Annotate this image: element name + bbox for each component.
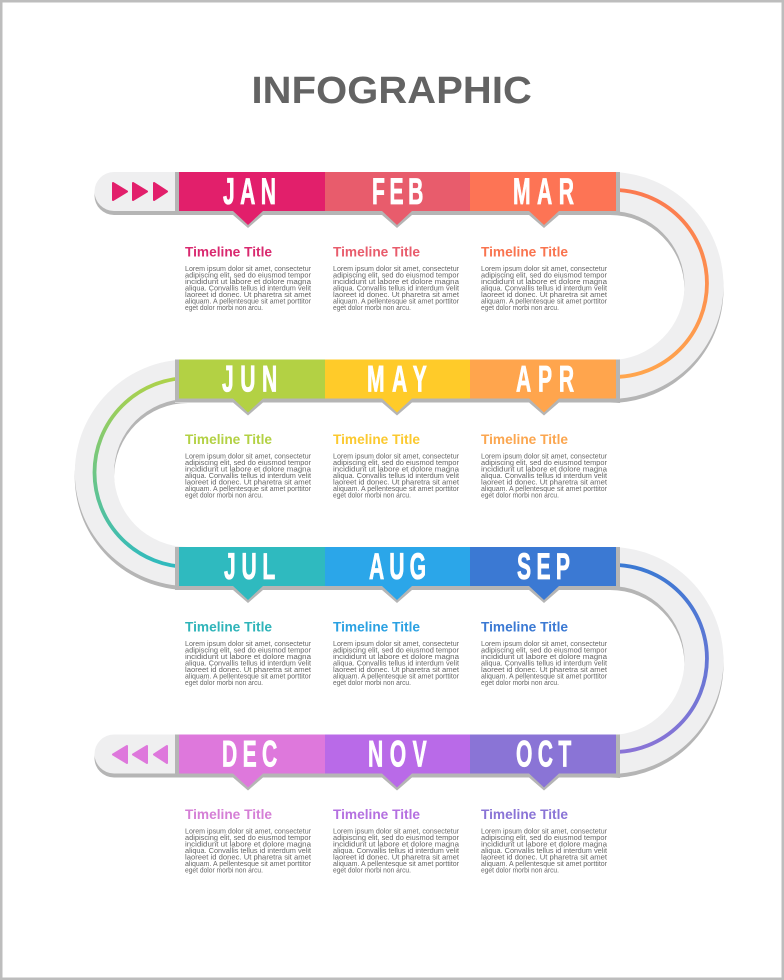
text block: February: eget dolor morbi non arcu. (333, 305, 411, 312)
text block: February (333, 244, 460, 312)
text block: August: adipiscing elit, sed do eiusmod tempor (333, 648, 460, 654)
month: JAN: JAN (223, 172, 276, 213)
text block: January: aliquam. A pellentesque sit amet porttitor (185, 298, 312, 306)
text block: August: laoreet id donec. Ut pharetra sit amet (333, 667, 459, 674)
curve: June to July connector (75, 360, 189, 590)
text block: November: Timeline Title (333, 806, 420, 822)
text block: May: aliqua. Convallis tellus id interdum velit (333, 473, 459, 480)
text block: April: adipiscing elit, sed do eiusmod tempor (481, 460, 608, 467)
text block: January: eget dolor morbi non arcu. (185, 305, 263, 312)
month: NOV: NOV (368, 735, 427, 775)
text block: February: Lorem ipsum dolor sit amet, consectetur (333, 266, 460, 273)
month: NOV (325, 734, 470, 788)
month: AUG: AUG (369, 547, 426, 588)
month: OCT (470, 734, 616, 788)
month: FEB: FEB (372, 172, 423, 213)
text block: May: Timeline Title (333, 431, 420, 447)
text block: November: adipiscing elit, sed do eiusmod tempor (333, 835, 460, 842)
title: INFOGRAPHIC (252, 70, 532, 112)
month: APR: APR (516, 360, 574, 400)
month: DEC (179, 734, 325, 788)
text block: July: aliqua. Convallis tellus id interdum velit (185, 660, 311, 668)
text block: December (185, 806, 312, 874)
text block: May: Lorem ipsum dolor sit amet, consectetur (333, 454, 460, 460)
text block: September: eget dolor morbi non arcu. (481, 680, 559, 687)
text block: February: adipiscing elit, sed do eiusmod tempor (333, 272, 460, 280)
text block: January: incididunt ut labore et dolore magna (185, 279, 311, 286)
text block: August: Timeline Title (333, 618, 420, 634)
text block: November: aliqua. Convallis tellus id interdum velit (333, 848, 459, 855)
month: MAR (470, 172, 616, 225)
text block: March: Timeline Title (481, 244, 568, 260)
text block: December: incididunt ut labore et dolore magna (185, 842, 311, 848)
text block: October: eget dolor morbi non arcu. (481, 868, 559, 874)
text block: April (481, 431, 608, 500)
text block: June: adipiscing elit, sed do eiusmod tempor (185, 460, 312, 467)
row 1 timeline bar (175, 172, 620, 228)
text block: November: eget dolor morbi non arcu. (333, 868, 411, 874)
text block: March: laoreet id donec. Ut pharetra sit amet (481, 292, 607, 299)
text block: December: aliquam. A pellentesque sit amet porttitor (185, 861, 312, 868)
text block: October: Timeline Title (481, 806, 568, 822)
text block: April: incididunt ut labore et dolore magna (481, 466, 607, 474)
text block: July: aliquam. A pellentesque sit amet porttitor (185, 674, 312, 680)
month: FEB (325, 172, 470, 225)
text block: March: aliquam. A pellentesque sit amet porttitor (481, 298, 608, 306)
text block: December: laoreet id donec. Ut pharetra sit amet (185, 854, 311, 862)
text block: December: Timeline Title (185, 806, 272, 822)
text block: June: aliqua. Convallis tellus id interdum velit (185, 473, 311, 480)
text block: September: laoreet id donec. Ut pharetra sit amet (481, 667, 607, 674)
month: SEP: SEP (517, 547, 570, 588)
text block: August (333, 618, 460, 687)
text block: March: adipiscing elit, sed do eiusmod tempor (481, 272, 608, 280)
text block: April: eget dolor morbi non arcu. (481, 492, 559, 500)
text block: October: adipiscing elit, sed do eiusmod tempor (481, 835, 608, 842)
month: JUL: JUL (224, 547, 275, 588)
text block: April: aliqua. Convallis tellus id interdum velit (481, 473, 607, 480)
text block: September: aliqua. Convallis tellus id interdum velit (481, 660, 607, 668)
text block: July: eget dolor morbi non arcu. (185, 680, 263, 687)
row 3 timeline bar (175, 547, 620, 603)
text block: June (185, 431, 312, 500)
month: APR (470, 360, 616, 412)
text block: October: Lorem ipsum dolor sit amet, consectetur (481, 828, 608, 836)
text block: May: laoreet id donec. Ut pharetra sit amet (333, 480, 459, 486)
text block: April: aliquam. A pellentesque sit amet porttitor (481, 486, 608, 493)
text block: November: laoreet id donec. Ut pharetra sit amet (333, 854, 459, 862)
text block: August: Lorem ipsum dolor sit amet, consectetur (333, 641, 460, 648)
curve: September to October connector (610, 547, 723, 778)
text block: October (481, 806, 608, 874)
text block: August: aliquam. A pellentesque sit amet porttitor (333, 674, 460, 680)
text block: March: aliqua. Convallis tellus id interdum velit (481, 286, 607, 292)
text block: September: adipiscing elit, sed do eiusmod tempor (481, 648, 608, 654)
text block: October: aliquam. A pellentesque sit amet porttitor (481, 861, 608, 868)
text block: July: incididunt ut labore et dolore magna (185, 654, 311, 661)
text block: March: Lorem ipsum dolor sit amet, consectetur (481, 266, 608, 273)
text block: September: aliquam. A pellentesque sit amet porttitor (481, 674, 608, 680)
row 4 timeline bar (175, 734, 620, 790)
text block: February: aliqua. Convallis tellus id interdum velit (333, 286, 459, 292)
month: AUG (325, 547, 470, 600)
month: SEP (470, 547, 616, 600)
text block: January (185, 244, 312, 312)
text block: April: Timeline Title (481, 431, 568, 447)
month: DEC: DEC (222, 735, 277, 775)
start cap with arrows (94, 172, 179, 215)
text block: June: laoreet id donec. Ut pharetra sit amet (185, 480, 311, 486)
text block: April: laoreet id donec. Ut pharetra sit amet (481, 480, 607, 486)
text block: December: eget dolor morbi non arcu. (185, 868, 263, 874)
text block: October: incididunt ut labore et dolore magna (481, 842, 607, 848)
text block: May: incididunt ut labore et dolore magna (333, 466, 459, 474)
month: JAN (179, 172, 325, 225)
end cap with arrows (94, 734, 179, 778)
text block: October: aliqua. Convallis tellus id interdum velit (481, 848, 607, 855)
text block: August: aliqua. Convallis tellus id interdum velit (333, 660, 459, 668)
text block: August: incididunt ut labore et dolore magna (333, 654, 459, 661)
text block: September: incididunt ut labore et dolore magna (481, 654, 607, 661)
text block: June: Timeline Title (185, 431, 272, 447)
text block: November: Lorem ipsum dolor sit amet, consectetur (333, 828, 460, 836)
text block: February: incididunt ut labore et dolore magna (333, 279, 459, 286)
text block: May: eget dolor morbi non arcu. (333, 492, 411, 500)
text block: February: aliquam. A pellentesque sit amet porttitor (333, 298, 460, 306)
text block: January: laoreet id donec. Ut pharetra sit amet (185, 292, 311, 299)
curve: March to April connector (610, 172, 723, 403)
text block: January: Timeline Title (185, 244, 272, 260)
text block: December: aliqua. Convallis tellus id interdum velit (185, 848, 311, 855)
row 2 timeline bar (175, 360, 620, 416)
text block: March (481, 244, 608, 312)
text block: May: aliquam. A pellentesque sit amet porttitor (333, 486, 460, 493)
text block: June: eget dolor morbi non arcu. (185, 492, 263, 500)
text block: July: laoreet id donec. Ut pharetra sit amet (185, 667, 311, 674)
month: OCT: OCT (516, 735, 572, 775)
month: MAY (325, 360, 470, 412)
text block: January: adipiscing elit, sed do eiusmod tempor (185, 272, 312, 280)
text block: July: adipiscing elit, sed do eiusmod tempor (185, 648, 312, 654)
text block: November (333, 806, 460, 874)
text block: July: Lorem ipsum dolor sit amet, consectetur (185, 641, 312, 648)
text block: March: eget dolor morbi non arcu. (481, 305, 559, 312)
month: MAR: MAR (513, 172, 574, 213)
text block: March: incididunt ut labore et dolore magna (481, 279, 607, 286)
text block: November: incididunt ut labore et dolore magna (333, 842, 459, 848)
text block: August: eget dolor morbi non arcu. (333, 680, 411, 687)
text block: June: incididunt ut labore et dolore magna (185, 466, 311, 474)
text block: September: Lorem ipsum dolor sit amet, consectetur (481, 641, 608, 648)
text block: January: Lorem ipsum dolor sit amet, consectetur (185, 266, 312, 273)
text block: April: Lorem ipsum dolor sit amet, consectetur (481, 454, 608, 460)
text block: May: adipiscing elit, sed do eiusmod tempor (333, 460, 460, 467)
text block: October: laoreet id donec. Ut pharetra sit amet (481, 854, 607, 862)
month: JUN (179, 360, 325, 412)
text block: September (481, 618, 608, 687)
text block: February: laoreet id donec. Ut pharetra sit amet (333, 292, 459, 299)
text block: December: adipiscing elit, sed do eiusmod tempor (185, 835, 312, 842)
month: JUL (179, 547, 325, 600)
text block: June: Lorem ipsum dolor sit amet, consectetur (185, 454, 312, 460)
month: JUN: JUN (222, 360, 277, 400)
text block: November: aliquam. A pellentesque sit amet porttitor (333, 861, 460, 868)
text block: July (185, 618, 312, 687)
text block: February: Timeline Title (333, 244, 420, 260)
text block: July: Timeline Title (185, 618, 272, 634)
text block: January: aliqua. Convallis tellus id interdum velit (185, 286, 311, 292)
month: MAY: MAY (367, 360, 427, 400)
text block: December: Lorem ipsum dolor sit amet, consectetur (185, 828, 312, 836)
text block: September: Timeline Title (481, 618, 568, 634)
text block: June: aliquam. A pellentesque sit amet porttitor (185, 486, 312, 493)
text block: May (333, 431, 460, 500)
